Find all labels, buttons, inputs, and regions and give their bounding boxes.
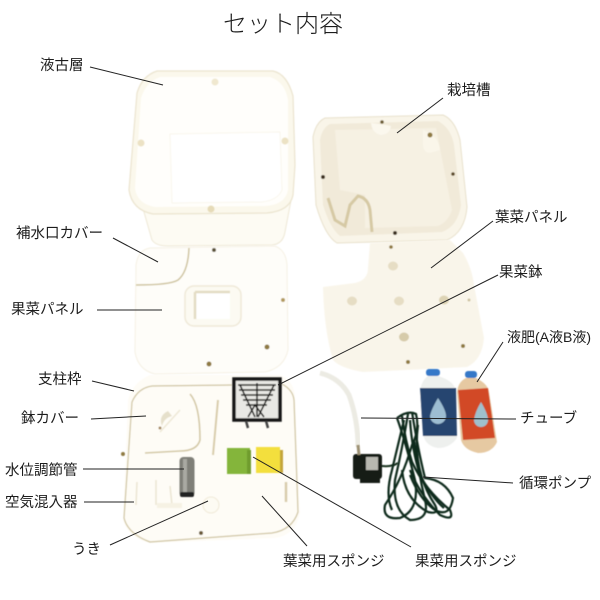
label: 栽培槽: 栽培槽 [447,82,490,99]
label: 果菜用スポンジ [253,457,516,570]
label: 葉菜用スポンジ [262,496,384,570]
photo: water level tube [180,457,194,497]
label: 補水口カバー: 補水口カバー [16,225,103,242]
photo: fruit vegetable pot [234,379,280,428]
label: 栽培槽 [397,82,490,133]
label: 液肥: 液肥(A液B液) [507,329,591,345]
photo: red bottle [457,371,497,453]
label: 水位調節管: 水位調節管 [5,461,78,479]
label: 鉢カバー [21,410,146,427]
label: 循環ポンプ [423,475,592,492]
label: 液古層 [40,57,163,85]
label: 果菜用スポンジ: 果菜用スポンジ [415,553,516,570]
label: 空気混入器 [5,494,134,511]
label: 液古層: 液古層 [40,57,84,74]
label: 葉菜パネル: 葉菜パネル [495,209,568,226]
photo: cultivation tank [313,115,467,243]
photo: tube [320,373,358,447]
label: 果菜鉢 [278,264,543,385]
photo: fruit vegetable panel [135,246,288,374]
label: 液肥 [477,329,591,382]
label: 果菜鉢: 果菜鉢 [499,264,543,281]
photo: leaf vegetable panel [323,240,484,372]
label: うき: うき [72,541,101,558]
label: 支柱枠 [38,371,134,391]
photo: pump [353,445,398,483]
label: 空気混入器: 空気混入器 [5,494,78,511]
label: 葉菜用スポンジ: 葉菜用スポンジ [283,553,384,570]
label: 果菜パネル: 果菜パネル [11,301,84,318]
photo: green sponge [227,448,251,474]
label: 補水口カバー [16,225,158,262]
label: 支柱枠: 支柱枠 [38,371,82,388]
title: セット内容 [223,11,343,38]
label: 葉菜パネル [431,209,568,268]
photo: yellow sponge [256,447,283,473]
photo: blue bottle [420,369,457,448]
label: 鉢カバー: 鉢カバー [21,410,79,427]
label: チューブ: チューブ [520,409,577,427]
label: 循環ポンプ: 循環ポンプ [519,475,592,492]
label: うき [72,501,208,558]
photo: support frame tray [121,375,300,543]
photo: pump cord [385,412,453,520]
photo: reservoir tray [129,71,295,246]
